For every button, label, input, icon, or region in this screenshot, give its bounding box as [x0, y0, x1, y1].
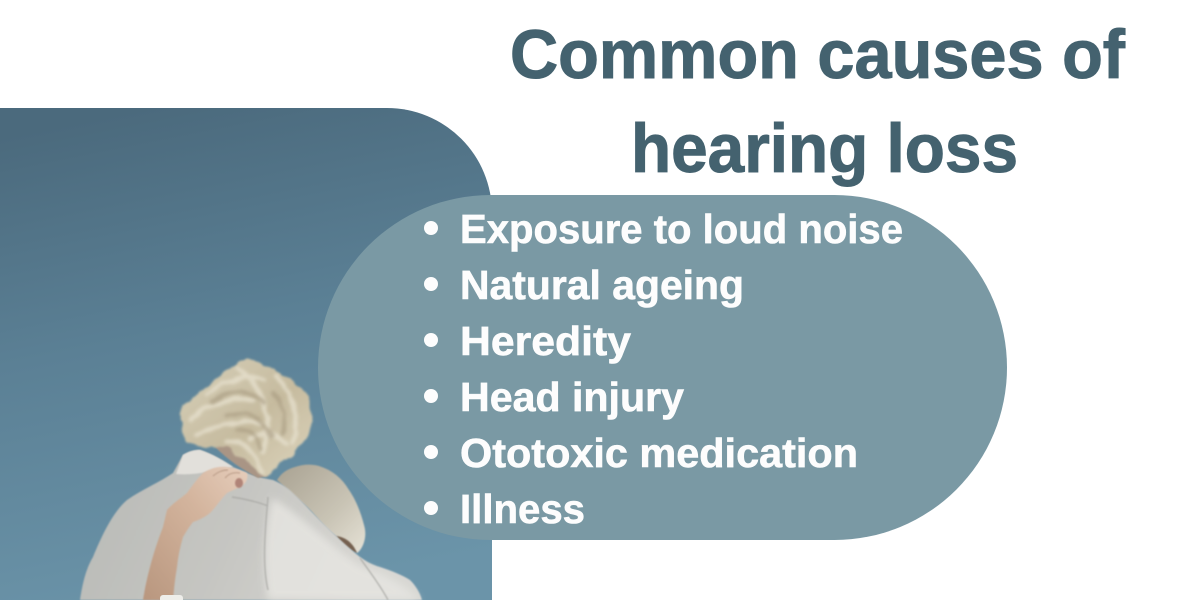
- list of causes: [424, 206, 903, 532]
- woman's white cuff: [160, 595, 183, 600]
- sleeve highlight: [265, 498, 420, 600]
- cause: heredity: Heredity: [460, 318, 631, 364]
- fingers: [213, 470, 240, 478]
- pill panel: list of causes: [318, 195, 1007, 540]
- photo panel: couple embracing against blue sky: [0, 108, 492, 600]
- title: Common causes of: [510, 16, 1126, 93]
- man's neck: [215, 443, 268, 478]
- cause: exposure to loud noise: Exposure to loud noise: [460, 206, 903, 252]
- cause: ototoxic medication: Ototoxic medication: [460, 430, 858, 476]
- woman's arm and hand on shoulder: [143, 467, 247, 600]
- woman's hair behind: [277, 465, 365, 553]
- sky background: [0, 108, 492, 600]
- title: hearing loss: [631, 110, 1018, 187]
- title: [510, 16, 1126, 187]
- cause: natural ageing: Natural ageing: [460, 262, 744, 308]
- shirt seams and folds: [232, 497, 388, 600]
- man's curly hair: [180, 360, 312, 477]
- woman's face: [336, 536, 357, 553]
- fingernail: [235, 478, 243, 488]
- man's back and shirt: [80, 450, 422, 600]
- cause: illness: Illness: [460, 486, 585, 532]
- cause: head injury: Head injury: [460, 374, 684, 420]
- shirt collar: [176, 450, 233, 474]
